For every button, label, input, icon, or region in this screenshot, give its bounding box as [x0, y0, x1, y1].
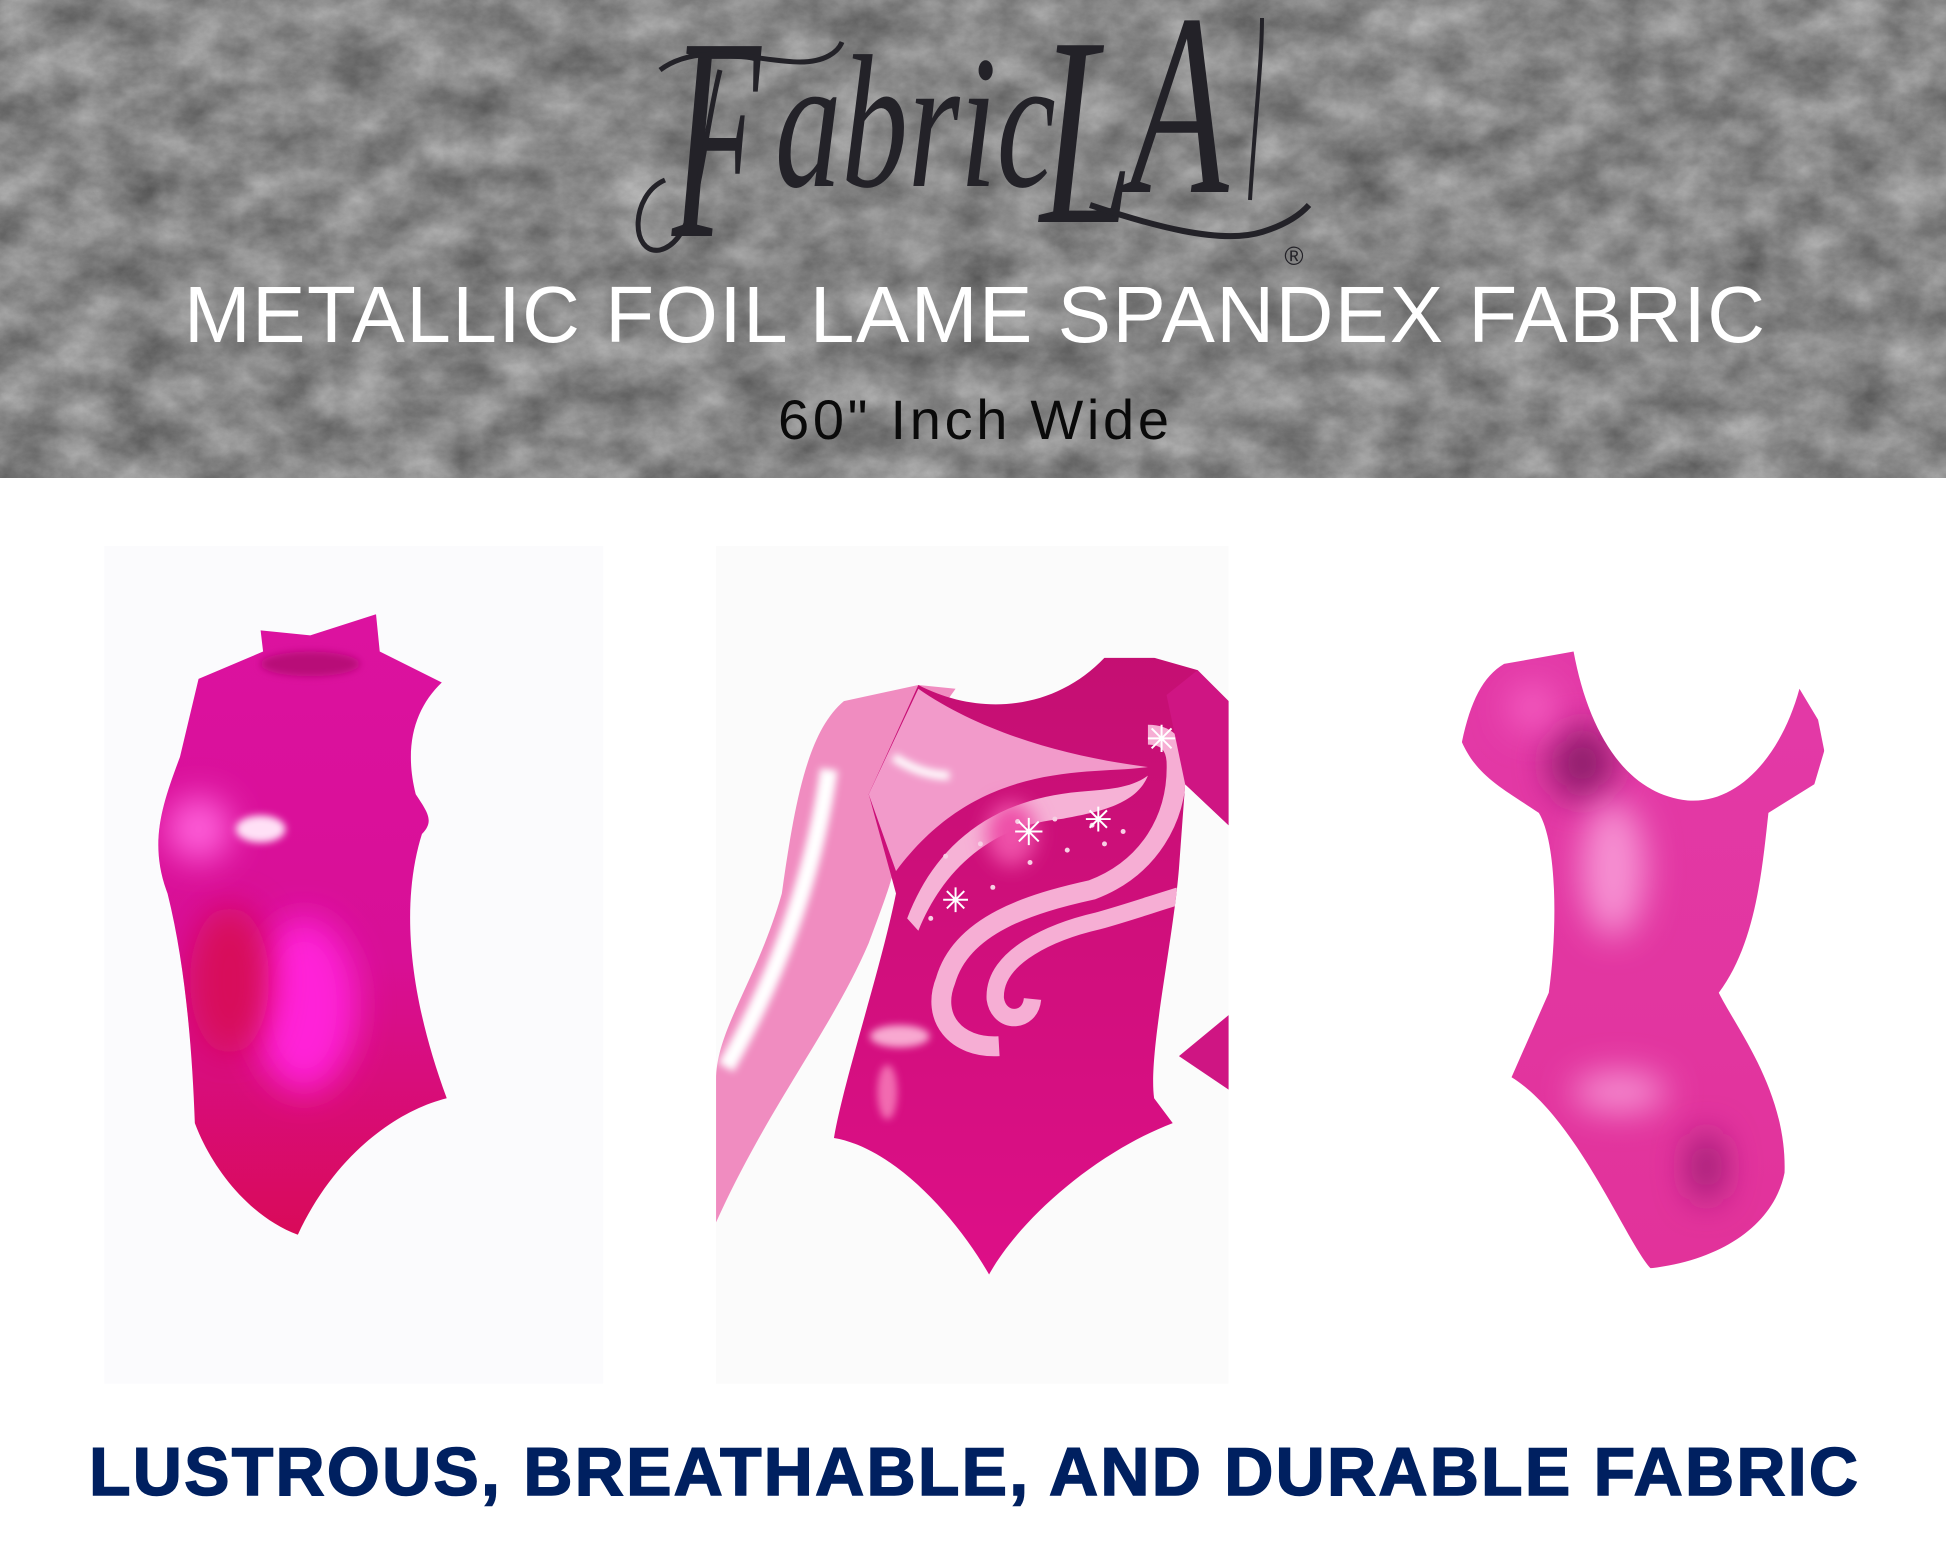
garment: body with swirl design — [834, 658, 1228, 1274]
logo: FabricLA: abric — [775, 18, 1056, 228]
panel: sleeveless metallic leotard — [158, 614, 447, 1235]
garment: scoop-back leotard — [1452, 645, 1837, 1278]
panel: long-sleeve swirl leotard — [716, 658, 1229, 1274]
subtitle: width: 60" Inch Wide — [778, 388, 1169, 451]
garment: right sleeve and cuff — [1167, 670, 1229, 1090]
title: METALLIC FOIL LAME SPANDEX FABRIC — [184, 270, 1765, 359]
logo: FabricLA — [638, 0, 1309, 299]
tagline: LUSTROUS, BREATHABLE, AND DURABLE FABRIC — [89, 1434, 1858, 1510]
registered mark: ® — [1284, 241, 1304, 271]
garment: left sleeve in pale pink — [716, 685, 956, 1222]
header banner: grey marble texture — [0, 0, 1946, 478]
panel: cap-sleeve metallic leotard — [1452, 645, 1837, 1278]
sparkles — [943, 725, 1175, 912]
rhinestones — [928, 817, 1126, 921]
garment: high-neck leotard — [158, 614, 447, 1235]
